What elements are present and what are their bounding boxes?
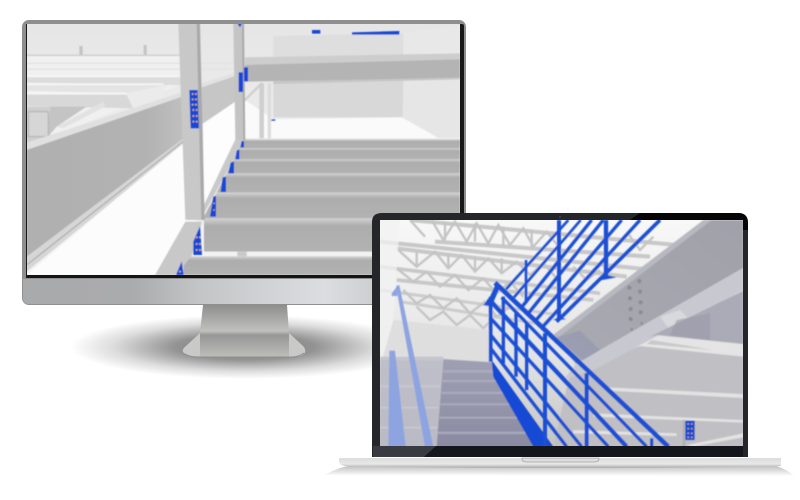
laptop base shadow: [325, 464, 795, 476]
left deck joists: [27, 45, 237, 147]
main sloped beam: [552, 220, 743, 380]
column two: [233, 23, 245, 140]
monitor screen frame: [26, 24, 464, 278]
upper railing post bases: [553, 275, 617, 320]
column one: [178, 23, 205, 220]
laptop scene: blue railing and stair: [380, 220, 743, 447]
second girder: [202, 76, 262, 124]
laptop base: [339, 458, 781, 468]
blue ceiling pieces: [312, 30, 399, 35]
monitor screen bottom edge: [26, 275, 464, 278]
blue connection plates: [176, 23, 248, 275]
far stair flight: [380, 357, 443, 447]
stair risers: [183, 139, 460, 275]
lower blue railing: [488, 283, 668, 447]
monitor bezel: [22, 20, 466, 305]
bolts: [179, 93, 215, 273]
monitor shadow: [70, 315, 420, 379]
laptop notch: [522, 458, 599, 462]
laptop camera: [559, 216, 561, 218]
white floor under beam: [27, 131, 197, 275]
blue connection plate: [683, 420, 695, 447]
beam shadow: [557, 331, 600, 360]
upper right girder: [245, 53, 460, 84]
lower stringer: [155, 222, 202, 275]
roof trusses: [380, 220, 677, 328]
left wall and glare: [380, 240, 399, 356]
laptop lower bezel: [373, 446, 743, 457]
upper blue railing: [506, 220, 660, 326]
white gap behind stringer: [203, 102, 235, 204]
monitor: [22, 20, 466, 305]
monitor stand: [183, 305, 305, 357]
lower wall: [553, 346, 743, 447]
monitor scene: steel stair model: [27, 23, 460, 275]
beam bolts: [627, 279, 643, 331]
blue stringer: [492, 360, 553, 447]
main girder: [27, 94, 183, 272]
stringer: [204, 140, 244, 213]
laptop lid: [372, 213, 748, 457]
laptop: [372, 213, 748, 457]
monitor chin: [23, 279, 465, 304]
main stair flight: [437, 359, 535, 447]
back room: [244, 32, 436, 138]
translucent left handrail: [388, 285, 433, 447]
railing top finial: [483, 285, 500, 306]
